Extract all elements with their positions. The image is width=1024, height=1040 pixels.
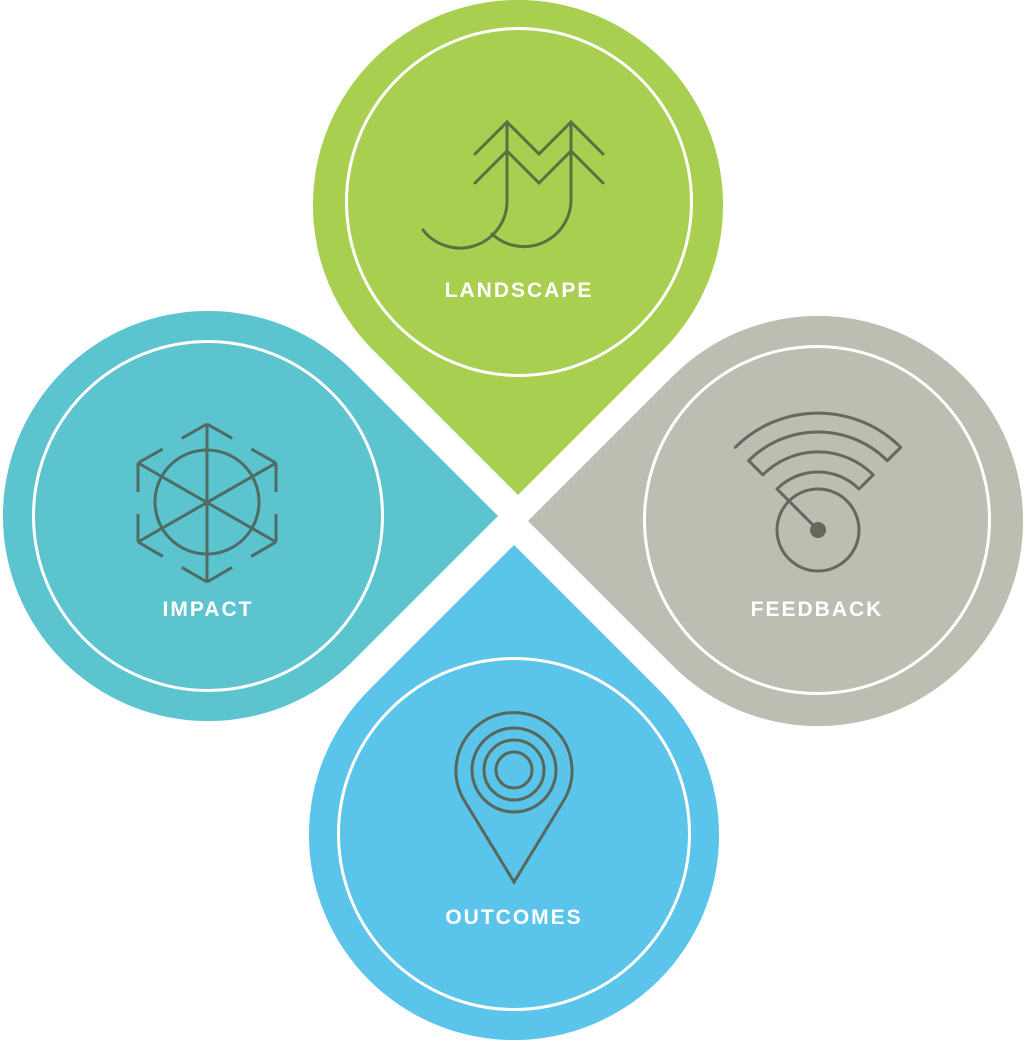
ring: outcomes [337,657,691,1011]
label: feedback: FEEDBACK [751,598,883,621]
icon: landscape [423,122,603,248]
label: outcomes: OUTCOMES [445,906,583,929]
drop: landscape [313,0,723,495]
label: landscape: LANDSCAPE [445,279,593,302]
ring: landscape [345,27,693,377]
drop: outcomes [309,545,719,1040]
label: impact: IMPACT [163,598,253,621]
ring: impact [32,340,384,692]
ring: feedback [643,345,991,695]
icon: impact [138,424,276,582]
icon: feedback [735,413,901,571]
drop: impact [3,311,498,721]
drop: feedback [528,316,1023,726]
icon: outcomes [456,713,572,882]
